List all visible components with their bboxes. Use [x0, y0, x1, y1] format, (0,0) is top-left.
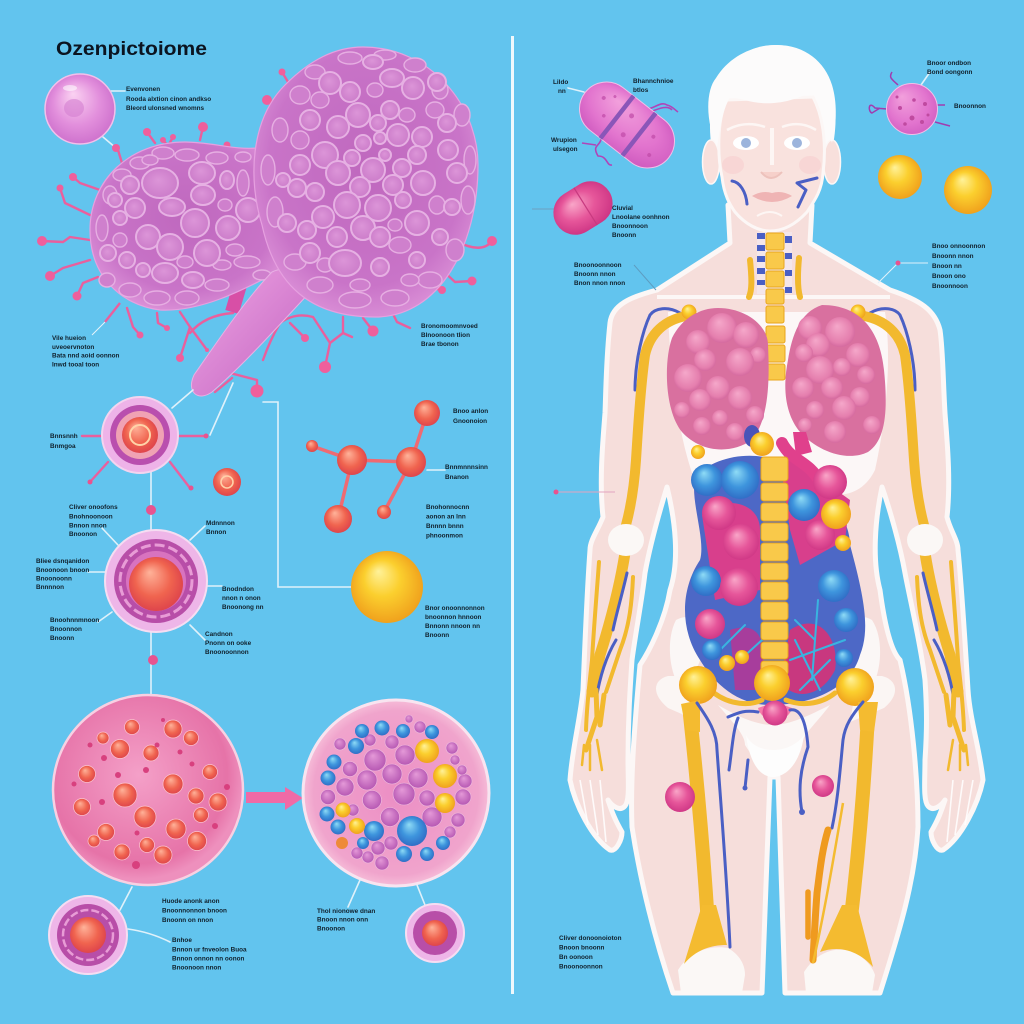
text: lower-center label: Bnoon nnon onn: [317, 916, 368, 924]
text: ringed cell left label: Bnoonoonn: [36, 576, 72, 582]
text: shoulder-left label: Bnon nnon nnon: [574, 280, 625, 287]
text: ringed cell lower-right label: Pnonn on ooke: [205, 640, 252, 647]
hand bones: [582, 740, 968, 770]
text: pill label: Bnoonn: [612, 232, 636, 239]
text: ringed cell top-left label: Bnoonon: [69, 531, 97, 538]
title: Ozenpictoiome: [56, 38, 207, 60]
callout: arm pointer: [554, 490, 615, 494]
icon: pink ball right thigh: [812, 775, 834, 797]
lumbar spine: [761, 457, 788, 675]
text: ringed cell lower-right label: Bnoonoonnon: [205, 649, 249, 656]
left arm bones and vessels: [586, 304, 696, 750]
callout: shoulder-right pointer: [878, 260, 928, 283]
text: ringed cell lower-left label: Bnoonnon: [50, 626, 82, 633]
text: bacterium lower-left label: ulsegon: [553, 146, 578, 153]
text: left blob label: Bata nnd aoid oonnon: [52, 352, 120, 360]
icon: yellow sphere one: [878, 155, 922, 199]
text: shoulder-right label: Bnoonn nnon: [932, 253, 974, 260]
text: left blob label: uveoervnoton: [52, 344, 94, 351]
text: cell label: Evenvonen: [126, 86, 160, 93]
text: ringed cell left label: Bnoonoon bnoon: [36, 567, 89, 574]
clavicle line: [657, 295, 890, 299]
text: ringed cell left label: Bnnnnon: [36, 584, 64, 591]
head: [702, 45, 840, 231]
left lung: [667, 308, 769, 449]
text: ringed cell top-left label: Cliver onoofons: [69, 504, 118, 511]
text: swirl cell label: Bnnsnnh: [50, 433, 78, 440]
text: ringed cell right label: Bnodndon: [222, 586, 254, 593]
text: bacterium top-left label: Lildo: [553, 79, 568, 86]
text: cell label: Bleord ulonsned wnomns: [126, 105, 205, 112]
text: lower body label: Bnoon bnoonn: [559, 944, 605, 952]
text: sphere label: bnoonnon hnnoon: [425, 614, 482, 621]
text: molecule label middle: Bnanon: [445, 474, 469, 481]
text: ringed cell lower-left label: Bnoonn: [50, 635, 74, 642]
text: sphere label: Bnnonn nnoon nn: [425, 623, 480, 630]
callout: shoulder-left pointer: [634, 265, 656, 290]
icon: single pink cell: [45, 74, 125, 148]
text: ringed cell left label: Bliee dsnqanidon: [36, 558, 89, 565]
text: bacterium top-right label: Bhannchnioe: [633, 78, 674, 85]
icon: spiky cell top right: [869, 72, 950, 134]
abdominal organs: [685, 425, 865, 705]
text: molecule label bottom: phnoonmon: [426, 532, 463, 540]
icon: pink ball left thigh: [665, 782, 695, 812]
text: molecule label bottom: aonon an lnn: [426, 514, 466, 520]
left lobe: [90, 142, 285, 310]
text: right blob label: Brae tbonon: [421, 341, 459, 348]
pelvic pads: [670, 617, 880, 678]
icon: lower-right cell: [348, 880, 464, 962]
text: pill label: Bnoonnoon: [612, 223, 648, 230]
text: shoulder-right label: Bnoon ono: [932, 273, 966, 280]
text: sphere label: Bnor onoonnonnon: [425, 605, 485, 612]
right arm bones and vessels: [850, 304, 964, 750]
text: ringed cell lower-right label: Candnon: [205, 631, 233, 638]
text: lower-left top label: Bnoonnonnon bnoon: [162, 908, 227, 914]
illustration: large lobed cell cluster: [37, 47, 497, 398]
panel: mixed vesicle circle: [303, 700, 489, 886]
text: bacterium top-right label: btlos: [633, 87, 649, 94]
text: lower body label: Bn oonoon: [559, 954, 593, 961]
body silhouette: [570, 205, 983, 993]
text: lower-left top label: Huode anonk anon: [162, 898, 220, 905]
icon: cell with swirl nucleus: [82, 397, 208, 490]
right lung: [785, 305, 886, 456]
text: lower body label: Bnoonoonnon: [559, 964, 603, 970]
icon: small red cell: [213, 468, 241, 496]
figure: human body: [570, 45, 983, 993]
text: ringed cell top-left label: Bnohnoonoon: [69, 514, 113, 520]
icon: lower-left cell: [49, 887, 170, 974]
text: lower-left top label: Bnoonn on nnon: [162, 917, 213, 924]
icon: bacterium capsule: [568, 71, 685, 179]
text: spiky cell top label: Bnoor ondbon: [927, 60, 971, 67]
text: molecule label bottom: Bnohonnocnn: [426, 504, 469, 511]
text: shoulder-right label: Bnoo onnoonnon: [932, 243, 985, 250]
text: spiky cell top label: Bond oongonn: [927, 69, 973, 76]
text: ringed cell right label: nnon n onon: [222, 595, 261, 602]
connector lines: [146, 383, 352, 695]
text: molecule label top: Bnoo anlon: [453, 408, 488, 415]
text: molecule label middle: Bnnmnnnsinn: [445, 464, 488, 471]
arrow: [246, 787, 303, 810]
text: lower-center label: Bnoonon: [317, 926, 345, 932]
text: ringed cell top-right label: Mdnnnon: [206, 520, 235, 527]
icon: central ringed cell: [88, 526, 222, 640]
text: molecule label top: Gnoonoion: [453, 418, 487, 425]
text: bacterium lower-left label: Wrupion: [551, 137, 577, 144]
text: lower-left bottom label: Bnhoe: [172, 937, 192, 944]
pelvis: [656, 665, 895, 777]
right lobe: [254, 47, 478, 317]
text: shoulder-left label: Bnoonoonnoon: [574, 262, 622, 269]
panel: pink tissue circle: [53, 695, 243, 885]
text: ringed cell top-right label: Bnnon: [206, 529, 226, 536]
leg bones and vessels: [678, 700, 878, 993]
text: pill label: Cluvial: [612, 205, 633, 212]
text: molecule label bottom: Bnnnn bnnn: [426, 523, 464, 530]
icon: red pill: [532, 173, 621, 243]
text: shoulder-right label: Bnoonnoon: [932, 283, 968, 290]
hand fingers: [580, 780, 973, 842]
branching filaments: [37, 68, 497, 398]
icon: yellow sphere two: [944, 166, 992, 214]
duct tail: [191, 269, 310, 396]
icon: yellow sphere: [351, 551, 423, 623]
text: ringed cell lower-left label: Bnoohnnmnoon: [50, 617, 99, 624]
text: swirl cell label: Bnmgoa: [50, 443, 76, 450]
text: ringed cell top-left label: Bnnon nnon: [69, 522, 107, 530]
rear duct: [232, 285, 240, 312]
diagram: molecule: [306, 400, 445, 533]
text: lower-center label: Thol nionowe dnan: [317, 908, 375, 915]
text: lower-left bottom label: Bnoonoon nnon: [172, 964, 221, 972]
neck spine: [749, 232, 800, 380]
text: cell label: Rooda alxtion cinon andkso: [126, 96, 211, 103]
text: shoulder-left label: Bnoonn nnon: [574, 271, 616, 278]
text: sphere label: Bnoonn: [425, 632, 449, 639]
text: lower-left bottom label: Bnnon onnon nn oonon: [172, 956, 244, 962]
text: spiky cell right label: Bnoonnon: [954, 103, 986, 110]
text: lower-left bottom label: Bnnon ur fnveolon Buoa: [172, 946, 247, 954]
text: lower body label: Cliver donoonoioton: [559, 935, 622, 942]
text: right blob label: Blnoonoon tlion: [421, 332, 470, 339]
text: right blob label: Bronomoomnvoed: [421, 323, 478, 330]
text: bacterium top-left label: nn: [558, 88, 566, 95]
text: left blob label: Inwd tooal toon: [52, 362, 99, 368]
text: shoulder-right label: Bnoon nn: [932, 263, 962, 270]
text: ringed cell right label: Bnoonong nn: [222, 604, 264, 611]
chest backing: [668, 312, 888, 495]
text: pill label: Lnoolane oonhnon: [612, 214, 670, 221]
text: left blob label: Vile hueion: [52, 335, 86, 342]
